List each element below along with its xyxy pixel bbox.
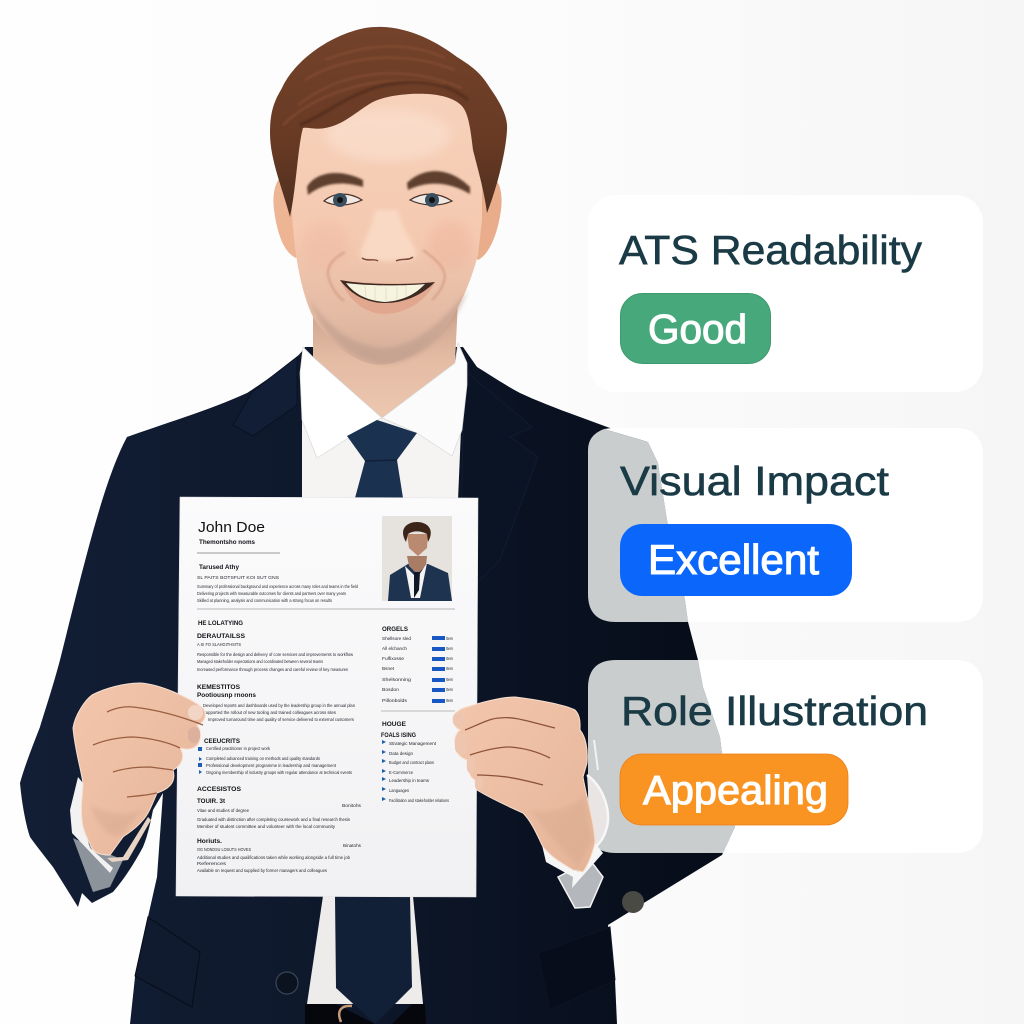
resume skills column: Shelsonning bbox=[382, 677, 411, 682]
resume skills column: Item bbox=[446, 666, 453, 671]
heading: ATS Readability: ATS Readability bbox=[619, 227, 923, 273]
resume document: Summary of professional background and experience across many roles and teams in the field bbox=[197, 584, 358, 589]
badge: Good bbox=[620, 294, 770, 364]
resume document: Additional studies and qualifications taken while working alongside a full time job bbox=[197, 855, 350, 860]
resume document: A SI FO SLAHGITHSITS bbox=[197, 642, 241, 647]
resume document: OG NONDSU LOSUTS HOVES bbox=[197, 847, 251, 852]
resume document: Graduated with distinction after completing coursework and a final research thesis bbox=[197, 817, 351, 822]
resume document: Completed advanced training on methods and quality standards bbox=[206, 756, 321, 761]
resume document: Member of student committee and volunteer with the local community bbox=[197, 824, 336, 829]
badge: Excellent: Excellent bbox=[648, 536, 819, 583]
resume document: KEMESTITOS bbox=[197, 684, 240, 691]
resume document: Tarused Athy bbox=[199, 564, 239, 571]
resume skills column bbox=[381, 626, 455, 803]
left hand bbox=[73, 683, 205, 855]
resume skills column: Languages bbox=[389, 788, 410, 793]
resume skills column: Facilitation and stakeholder relations bbox=[389, 798, 450, 803]
resume skills column: Item bbox=[446, 698, 453, 703]
resume document: Delivering projects with measurable outcomes for clients and partners over many years bbox=[197, 591, 347, 596]
resume document: Increased performance through process changes and careful review of key measures bbox=[197, 667, 349, 672]
resume document: Improved turnaround time and quality of service delivered to external customers bbox=[208, 717, 355, 722]
resume document: Binatohs bbox=[343, 843, 362, 848]
resume document: References bbox=[197, 861, 227, 866]
panel: ATS Readability card background bbox=[588, 195, 983, 392]
resume skills column: E-Commerce bbox=[389, 770, 413, 775]
panel: ATS Readability card bbox=[619, 227, 923, 364]
necktie knot and blade bbox=[347, 420, 417, 498]
neck bbox=[313, 300, 458, 418]
resume document: HE LOLATYING bbox=[198, 620, 243, 627]
resume document bbox=[176, 497, 478, 897]
right hand bbox=[453, 697, 595, 872]
resume document: DERAUTAILSS bbox=[197, 633, 245, 640]
jacket button bbox=[276, 972, 298, 994]
resume document: Ongoing membership of industry groups with regular attendance at technical events bbox=[206, 770, 353, 775]
resume portrait photo bbox=[382, 516, 452, 601]
resume document: ACCESISTOS bbox=[197, 786, 241, 793]
sleeve button bbox=[622, 891, 644, 913]
resume skills column: Shellsore sled bbox=[382, 636, 411, 641]
resume skills column: Budget and contract plans bbox=[389, 760, 435, 765]
mouth bbox=[340, 280, 435, 314]
collars bbox=[300, 347, 382, 458]
resume skills column: FOALS ISING bbox=[381, 732, 416, 739]
resume document: CEEUCRITS bbox=[204, 738, 240, 745]
resume document: Professional development programme in leadership and management bbox=[206, 763, 337, 768]
resume document: TOUIR. 3t bbox=[197, 798, 226, 805]
resume document: Responsible for the design and delivery of core services and improvements to workflow bbox=[197, 652, 354, 657]
heading: Visual Impact: Visual Impact bbox=[620, 458, 890, 504]
resume document: Certified practitioner in project work bbox=[206, 746, 271, 751]
resume skills column: Item bbox=[446, 646, 453, 651]
lower shirt bbox=[307, 896, 423, 1004]
resume skills column: Item bbox=[446, 656, 453, 661]
eyes bbox=[324, 194, 362, 205]
resume document: Managed stakeholder expectations and coordinated between several teams bbox=[197, 659, 324, 664]
resume skills column: Data design bbox=[389, 751, 413, 756]
resume document: Developed reports and dashboards used by the leadership group in the annual plan bbox=[203, 703, 355, 708]
badge: Appealing bbox=[620, 754, 848, 825]
resume skills column: Fulfixosse bbox=[382, 656, 404, 661]
resume skills column: Leadership in teams bbox=[389, 778, 430, 783]
resume skills column: Strategic Management bbox=[389, 741, 437, 746]
badge: Appealing: Appealing bbox=[643, 767, 828, 813]
badge: Excellent bbox=[620, 524, 852, 596]
shirt and tie bbox=[300, 300, 467, 1024]
resume name: John Doe bbox=[198, 519, 265, 536]
resume skills column: All elchanch bbox=[382, 646, 407, 651]
panel: Role Illustration card bbox=[587, 660, 983, 853]
hair bbox=[270, 27, 507, 217]
resume skills column: Item bbox=[446, 687, 453, 692]
eyebrows bbox=[307, 173, 363, 195]
heading: Role Illustration: Role Illustration bbox=[621, 688, 928, 734]
panel: Visual Impact card bbox=[588, 428, 983, 622]
resume document: Vitae and studies of degree bbox=[197, 808, 249, 813]
resume skills column: Item bbox=[446, 677, 453, 682]
shirt cuffs bbox=[70, 777, 603, 908]
resume document: Available on request and supplied by former managers and colleagues bbox=[197, 868, 328, 873]
resume skills column: ORGELS bbox=[382, 626, 408, 633]
resume document: Themontsho noms bbox=[199, 539, 255, 546]
resume document: Horiuts. bbox=[197, 838, 222, 845]
ears bbox=[273, 176, 304, 258]
smile lines bbox=[328, 250, 445, 301]
face bbox=[292, 85, 482, 365]
resume skills column: Pillonbolds bbox=[382, 698, 408, 703]
nose bbox=[360, 210, 417, 262]
resume document: Supported the rollout of new tooling and trained colleagues across sites bbox=[203, 710, 337, 715]
person: suit jacket bbox=[20, 347, 735, 1024]
resume skills column: Bsnet bbox=[382, 666, 395, 671]
resume document: Skilled at planning, analysis and communication with a strong focus on results bbox=[197, 598, 333, 603]
resume skills column: Item bbox=[446, 636, 453, 641]
teeth bbox=[346, 283, 425, 302]
resume document: SL PAITS BOTSFUIT KOI SUT GNS bbox=[197, 575, 279, 580]
person: head bbox=[270, 27, 507, 365]
resume skills column: HOUGE bbox=[382, 721, 406, 728]
lower tie bbox=[335, 896, 412, 1024]
badge: Good: Good bbox=[648, 306, 747, 352]
resume skills column: Bosdon bbox=[382, 687, 399, 692]
resume document: Pootiousnp rnoons bbox=[197, 692, 256, 699]
belt bbox=[305, 1004, 426, 1024]
resume document: Bonitohs bbox=[342, 803, 362, 808]
